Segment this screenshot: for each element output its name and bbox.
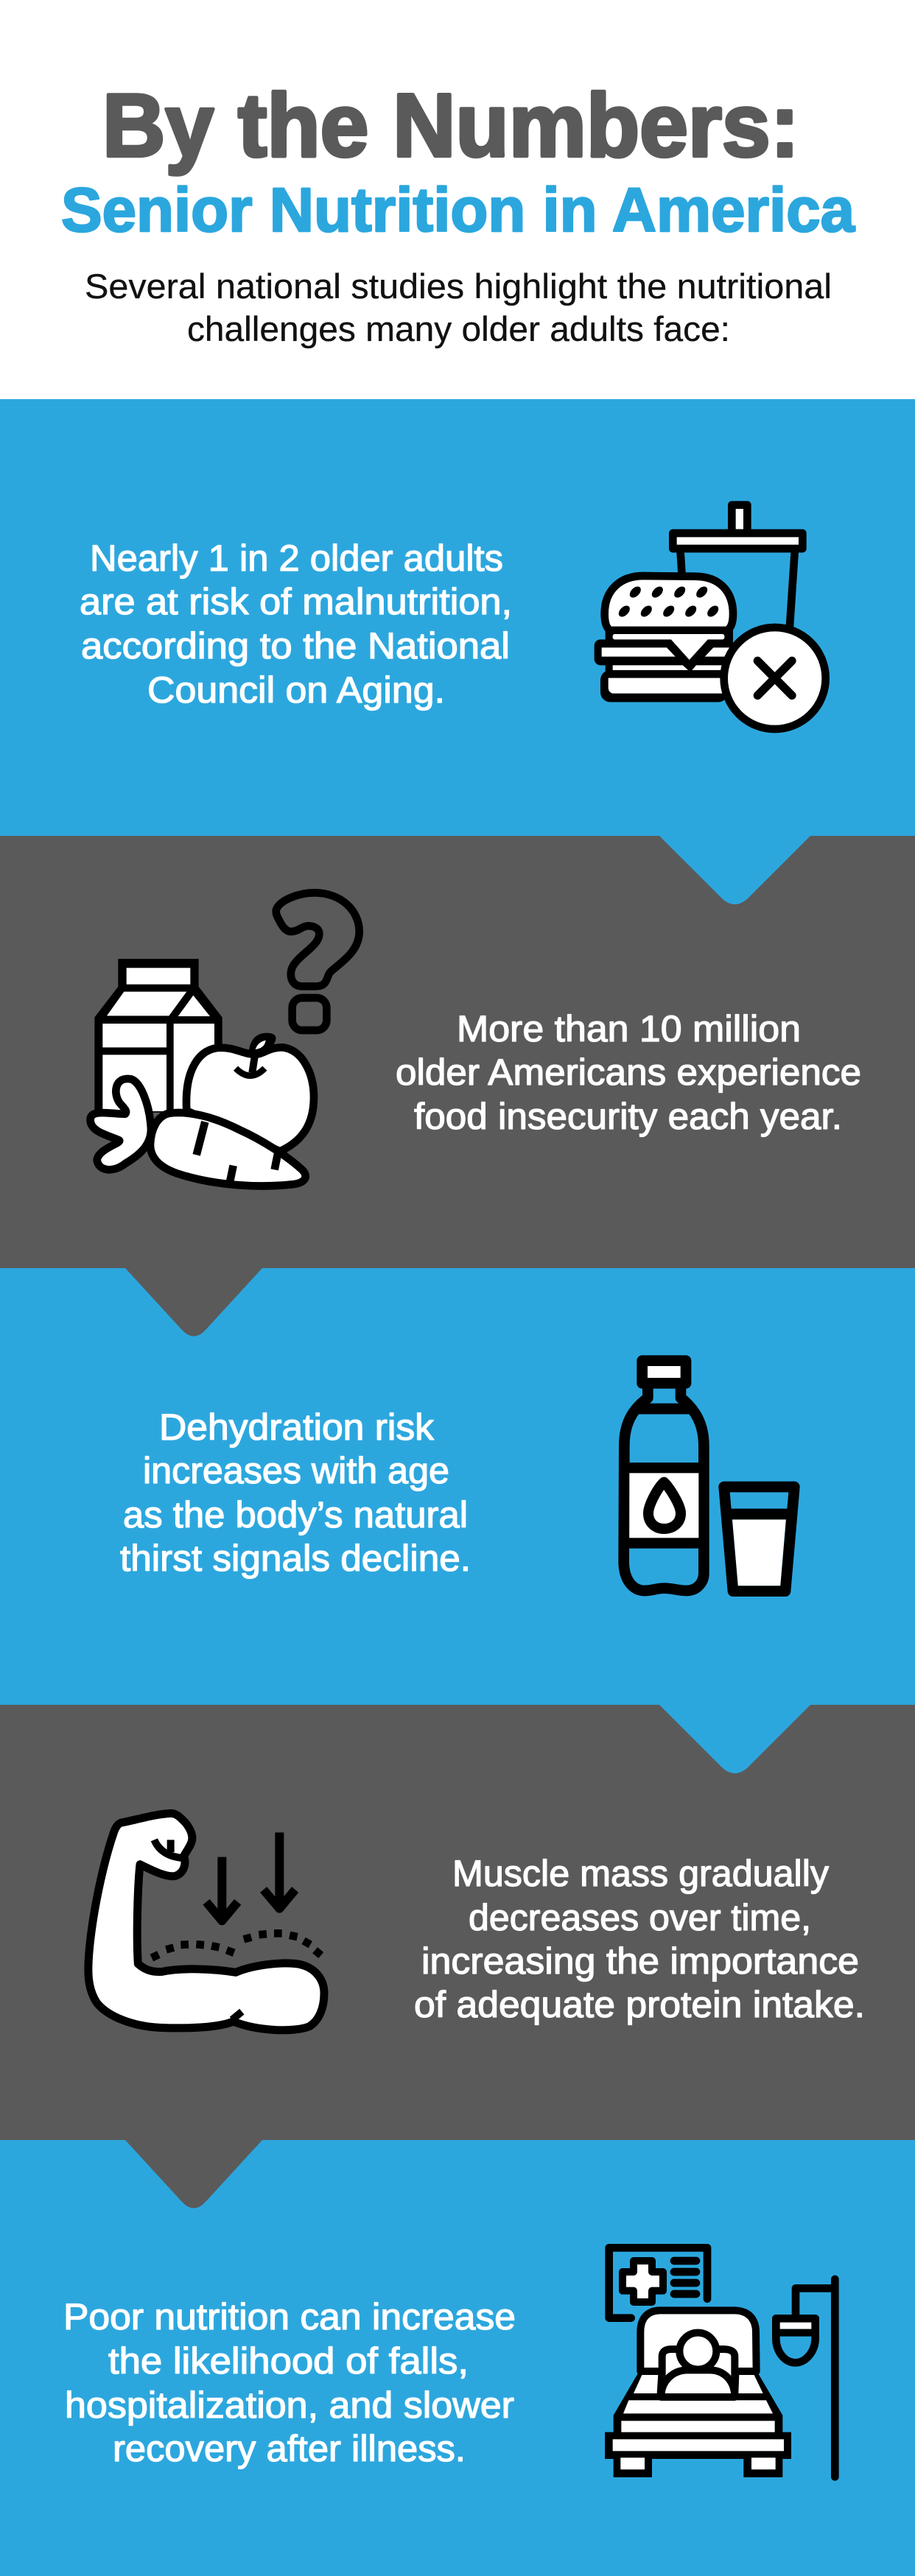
text: food insecurity: More than 10 million <box>457 1008 801 1049</box>
intro text: Several national studies highlight the nutritional <box>85 267 832 306</box>
text: malnutrition risk: Council on Aging. <box>147 669 445 711</box>
icon: milk, apple, carrot and question mark <box>91 893 360 1186</box>
text: poor nutrition outcomes: Poor nutrition can increase <box>63 2296 516 2337</box>
panel: muscle mass <box>0 1705 915 2140</box>
text: dehydration risk: thirst signals decline. <box>120 1538 471 1579</box>
text: malnutrition risk <box>80 538 512 711</box>
text: muscle mass: Muscle mass gradually <box>452 1853 829 1894</box>
header <box>61 75 855 348</box>
text: food insecurity: older Americans experience <box>396 1052 861 1093</box>
icon: water bottle and glass <box>624 1361 794 1591</box>
text: poor nutrition outcomes: the likelihood of falls, <box>108 2340 469 2382</box>
text: malnutrition risk: are at risk of malnutrition, <box>80 581 512 622</box>
text: food insecurity <box>396 1008 861 1137</box>
arrow: dark pointer into final panel <box>125 2140 262 2208</box>
icon: flexed arm with down arrows <box>88 1813 324 2030</box>
title: By the Numbers: <box>102 75 799 175</box>
arrow: blue pointer into muscle mass panel <box>659 1705 810 1773</box>
panel: malnutrition <box>0 399 915 836</box>
arrow: blue pointer into food insecurity panel <box>659 836 810 904</box>
subtitle: Senior Nutrition in America <box>61 175 855 244</box>
text: dehydration risk <box>120 1407 471 1579</box>
text: dehydration risk: increases with age <box>143 1450 449 1491</box>
text: poor nutrition outcomes: hospitalization, and slower <box>65 2385 514 2426</box>
text: poor nutrition outcomes <box>63 2296 516 2469</box>
text: muscle mass: decreases over time, <box>469 1897 811 1938</box>
intro text: challenges many older adults face: <box>187 309 730 348</box>
arrow: dark pointer into dehydration panel <box>125 1268 262 1336</box>
intro text <box>85 267 832 348</box>
text: muscle mass: increasing the importance <box>421 1940 859 1982</box>
text: muscle mass <box>414 1853 865 2025</box>
text: malnutrition risk: Nearly 1 in 2 older adults <box>90 538 503 579</box>
text: dehydration risk: as the body’s natural <box>123 1494 468 1535</box>
panel: falls and hospitalization <box>0 2140 915 2576</box>
text: food insecurity: food insecurity each year. <box>414 1096 842 1137</box>
text: malnutrition risk: according to the National <box>81 625 510 666</box>
icon: hospital bed with monitor and IV <box>606 2248 835 2477</box>
text: poor nutrition outcomes: recovery after illness. <box>113 2428 466 2469</box>
panel: dehydration <box>0 1268 915 1705</box>
icon: burger and drink with X <box>595 505 826 729</box>
text: muscle mass: of adequate protein intake. <box>414 1984 865 2025</box>
panel: food insecurity <box>0 836 915 1268</box>
text: dehydration risk: Dehydration risk <box>159 1407 435 1448</box>
